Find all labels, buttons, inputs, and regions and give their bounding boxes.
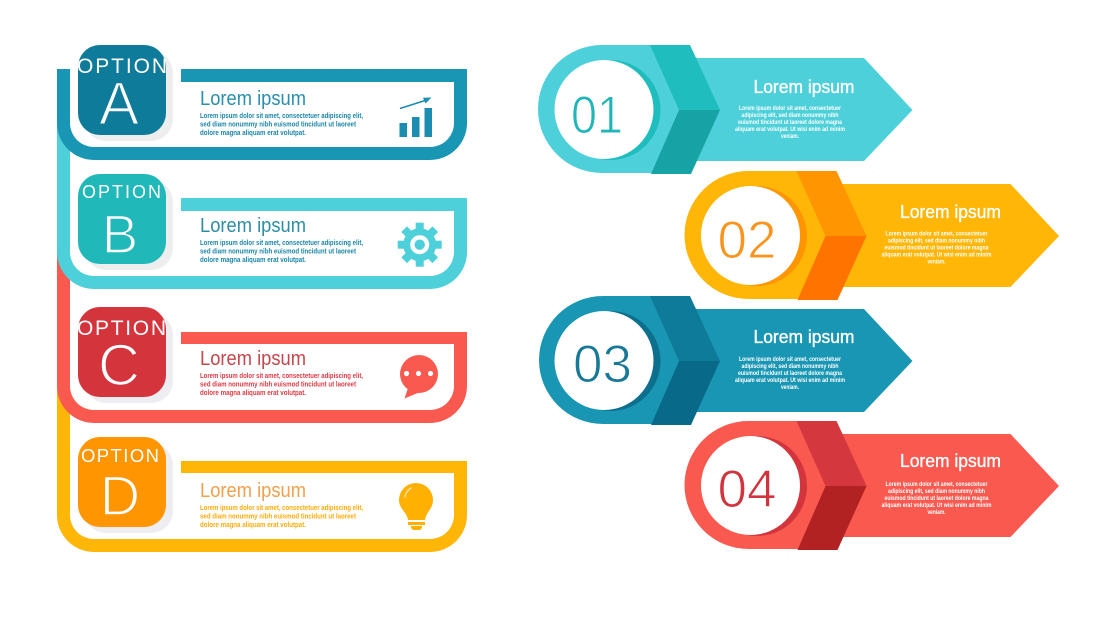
text block: step 01: veniam. (781, 134, 799, 140)
number: 03: 03 (573, 335, 632, 394)
heading: step 03: Lorem ipsum (754, 327, 854, 347)
frame: option B (57, 69, 467, 289)
text block: option D: sed diam nonummy nibh euismod tincidunt ut laoreet (200, 512, 356, 520)
text block: option B: sed diam nonummy nibh euismod tincidunt ut laoreet (200, 246, 356, 256)
badge letter: C: C (98, 333, 140, 398)
text block: step 02: adipiscing elit, sed diam nonummy nibh (888, 238, 985, 244)
text block: step 01: aliquam erat volutpat. Ut wisi enim ad minim (735, 127, 845, 133)
number circle: step 02 (701, 186, 800, 285)
badge shadow: option A (84, 51, 173, 141)
text block: option C: dolore magna aliquam erat volutpat. (200, 388, 306, 397)
text block: option D: dolore magna aliquam erat volutpat. (200, 520, 306, 529)
text block: option A: Lorem ipsum dolor sit amet, consectetuer adipiscing elit, (200, 111, 363, 120)
text block: option C: Lorem ipsum dolor sit amet, consectetuer adipiscing elit, (200, 371, 363, 380)
text block: step 04: adipiscing elit, sed diam nonummy nibh (888, 489, 985, 495)
badge: option C (78, 307, 166, 397)
chevron top: step 02 (796, 171, 866, 236)
text block: step 01: Lorem ipsum dolor sit amet, consectetuer (739, 106, 842, 112)
number circle: step 03 (554, 311, 654, 410)
heading: option C: Lorem ipsum (200, 348, 306, 370)
text block: option D (200, 503, 363, 529)
badge letter: B: B (102, 203, 138, 265)
text block: option B: Lorem ipsum dolor sit amet, consectetuer adipiscing elit, (200, 238, 363, 247)
text block: step 03: aliquam erat volutpat. Ut wisi enim ad minim (735, 378, 845, 384)
text block: step 03 (735, 357, 845, 391)
chevron top: step 03 (650, 296, 720, 361)
arrow body: step 02 (836, 184, 1059, 287)
badge shadow: option C (84, 313, 173, 403)
text block: step 02: Lorem ipsum dolor sit amet, consectetuer (886, 232, 988, 238)
chevron bottom: step 02 (798, 236, 866, 300)
icon: speech bubble (400, 355, 438, 398)
panel: step 02 (684, 171, 1059, 300)
chevron top: step 04 (796, 421, 866, 486)
text block: step 02: aliquam erat volutpat. Ut wisi enim ad minim (882, 252, 992, 258)
text block: step 03: adipiscing elit, sed diam nonummy nibh (742, 364, 839, 370)
panel: option A (57, 45, 467, 160)
text block: step 02: veniam. (928, 260, 946, 266)
text block: option B (200, 238, 363, 264)
chevron bottom: step 03 (651, 361, 720, 425)
text block: step 03: veniam. (781, 385, 799, 391)
text block: option A: sed diam nonummy nibh euismod tincidunt ut laoreet (200, 120, 356, 128)
chevron bottom: step 04 (798, 486, 866, 550)
badge: option A (78, 45, 166, 135)
frame: option A (57, 69, 467, 160)
text block: option B: dolore magna aliquam erat volutpat. (200, 255, 306, 264)
arrow body: step 03 (690, 309, 912, 412)
heading: option A: Lorem ipsum (200, 88, 306, 110)
chevron bottom: step 01 (651, 110, 720, 174)
text block: step 01 (735, 106, 845, 140)
heading: step 01: Lorem ipsum (754, 77, 854, 97)
crescent: step 01 (560, 60, 660, 160)
badge label: option C: OPTION (77, 317, 166, 340)
text block: step 04: euismod tincidunt ut laoreet dolore magna (884, 496, 989, 502)
text block: option D: Lorem ipsum dolor sit amet, consectetuer adipiscing elit, (200, 503, 363, 512)
ring: step 01 (538, 45, 680, 173)
frame: option C (57, 200, 467, 423)
badge label: option B: OPTION (82, 182, 161, 202)
text block: step 04: Lorem ipsum dolor sit amet, consectetuer (886, 482, 988, 488)
text block: option A: dolore magna aliquam erat volutpat. (200, 128, 306, 137)
heading: step 04: Lorem ipsum (900, 451, 1001, 471)
badge label: option A: OPTION (77, 55, 167, 78)
number: 04: 04 (718, 460, 776, 519)
badge label: option D: OPTION (81, 445, 159, 466)
ring: step 03 (539, 296, 680, 424)
panel: step 04 (684, 421, 1059, 550)
arrow body: step 04 (836, 434, 1059, 537)
icon: light bulb (399, 483, 433, 530)
text block: step 03: euismod tincidunt ut laoreet dolore magna (738, 371, 843, 377)
text block: step 04 (882, 482, 992, 516)
ring: step 04 (684, 421, 826, 549)
crescent: step 02 (707, 186, 807, 286)
arrow body: step 01 (690, 58, 912, 161)
text block: option C (200, 371, 363, 397)
badge: option B (78, 174, 166, 264)
text block: step 02: euismod tincidunt ut laoreet dolore magna (884, 246, 989, 252)
number: 02: 02 (718, 211, 776, 270)
badge shadow: option B (84, 180, 173, 270)
text block: step 04: veniam. (928, 510, 946, 516)
badge letter: A: A (99, 70, 139, 137)
text block: step 03: Lorem ipsum dolor sit amet, consectetuer (739, 357, 842, 363)
chevron top: step 01 (650, 45, 720, 110)
frame: option D (57, 330, 467, 552)
text block: option A (200, 111, 363, 137)
panel: option D (57, 330, 467, 552)
panel: option C (57, 200, 467, 423)
heading: option D: Lorem ipsum (200, 480, 306, 502)
panel: step 01 (538, 45, 912, 174)
panel: option B (57, 69, 467, 289)
heading: step 02: Lorem ipsum (900, 202, 1001, 222)
panel: step 03 (539, 296, 912, 425)
number: 01: 01 (571, 86, 623, 145)
icon: bar chart with arrow (400, 98, 432, 137)
text block: step 04: aliquam erat volutpat. Ut wisi enim ad minim (882, 503, 992, 509)
text block: option C: sed diam nonummy nibh euismod tincidunt ut laoreet (200, 380, 356, 388)
badge letter: D: D (100, 464, 140, 527)
crescent: step 03 (560, 311, 660, 411)
badge: option D (78, 437, 166, 527)
number circle: step 01 (554, 60, 654, 159)
text block: step 01: adipiscing elit, sed diam nonummy nibh (742, 113, 839, 119)
crescent: step 04 (707, 436, 807, 536)
text block: step 02 (882, 232, 992, 266)
icon: gear (398, 223, 442, 267)
text block: step 01: euismod tincidunt ut laoreet dolore magna (738, 120, 843, 126)
badge shadow: option D (84, 443, 173, 533)
number circle: step 04 (701, 436, 800, 535)
heading: option B: Lorem ipsum (200, 215, 306, 237)
ring: step 02 (684, 171, 826, 299)
